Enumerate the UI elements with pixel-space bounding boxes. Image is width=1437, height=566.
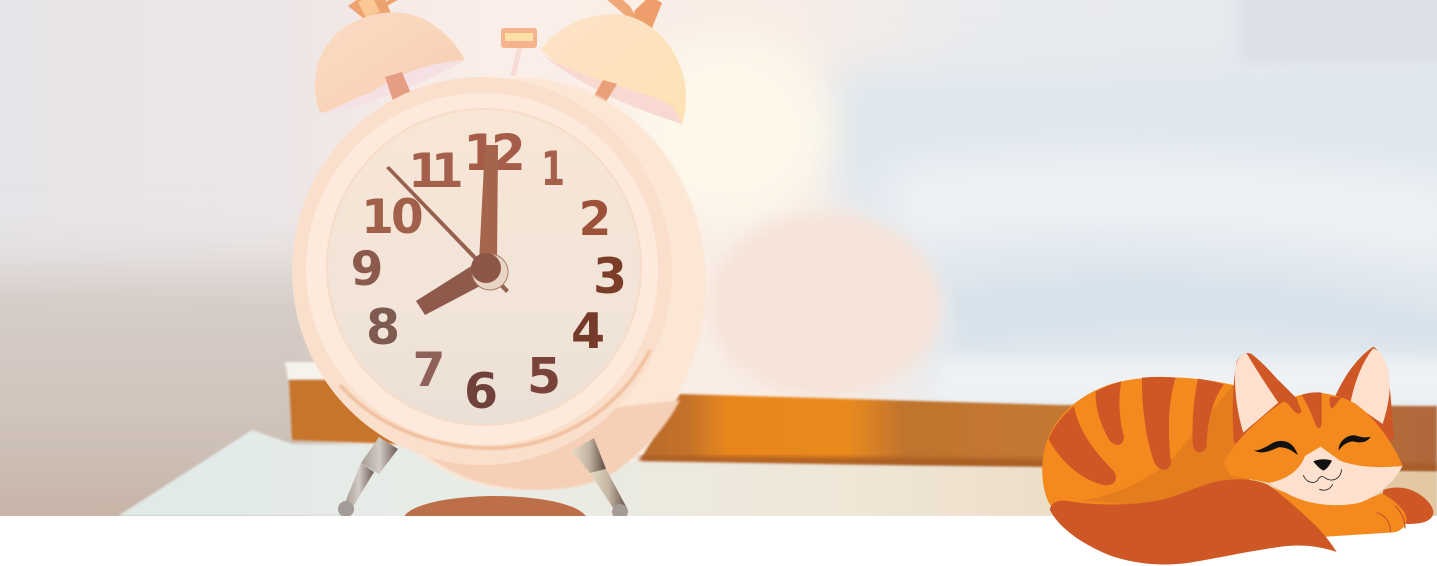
left foot — [338, 437, 398, 517]
back paw — [1380, 487, 1433, 524]
cat illustration — [1042, 347, 1433, 565]
hand hub — [472, 254, 508, 290]
minute hand — [479, 145, 498, 262]
head — [1224, 380, 1403, 505]
hour numerals: 1 — [541, 142, 565, 197]
body stripes — [1049, 377, 1224, 485]
right bell stem — [594, 80, 617, 102]
hour numerals: 10 — [361, 190, 422, 245]
right foot — [572, 438, 628, 520]
table top — [118, 430, 1437, 516]
left ear — [1233, 353, 1302, 443]
hour numerals — [351, 124, 627, 420]
right bell — [541, 14, 686, 124]
left bell hammer — [348, 0, 390, 18]
left bell stem — [385, 72, 410, 100]
lens flare circle — [709, 213, 941, 397]
alarm knob — [501, 28, 537, 76]
sun flare — [646, 52, 834, 208]
right bell hammer — [608, 0, 634, 18]
head stripes — [1278, 380, 1342, 428]
second hand — [386, 166, 509, 293]
mouth — [1303, 469, 1342, 490]
left bell — [315, 12, 465, 113]
hour numerals: 7 — [413, 343, 445, 398]
hour numerals: 6 — [464, 363, 498, 420]
reflection on table — [404, 496, 586, 516]
wooden tray — [285, 362, 1437, 472]
hour numerals: 3 — [593, 248, 627, 305]
hour numerals: 8 — [366, 299, 400, 356]
left closed eye — [1254, 441, 1298, 455]
tail — [1050, 479, 1337, 565]
nose — [1313, 459, 1332, 471]
cat body — [1042, 377, 1250, 505]
alarm clock — [292, 0, 706, 544]
front paw — [1263, 483, 1407, 540]
front rim — [292, 77, 616, 465]
hour numerals: 2 — [579, 192, 611, 247]
muzzle — [1269, 447, 1403, 505]
hour numerals: 9 — [351, 242, 383, 297]
hour numerals: 5 — [527, 348, 561, 405]
hour numerals: 4 — [571, 303, 605, 360]
right ear — [1330, 347, 1394, 440]
hour numerals: 12 — [463, 124, 522, 182]
hour hand — [416, 265, 482, 315]
hour numerals: 11 — [408, 144, 461, 199]
right closed eye — [1339, 435, 1371, 451]
rear case — [418, 78, 706, 490]
clock face — [328, 110, 640, 424]
